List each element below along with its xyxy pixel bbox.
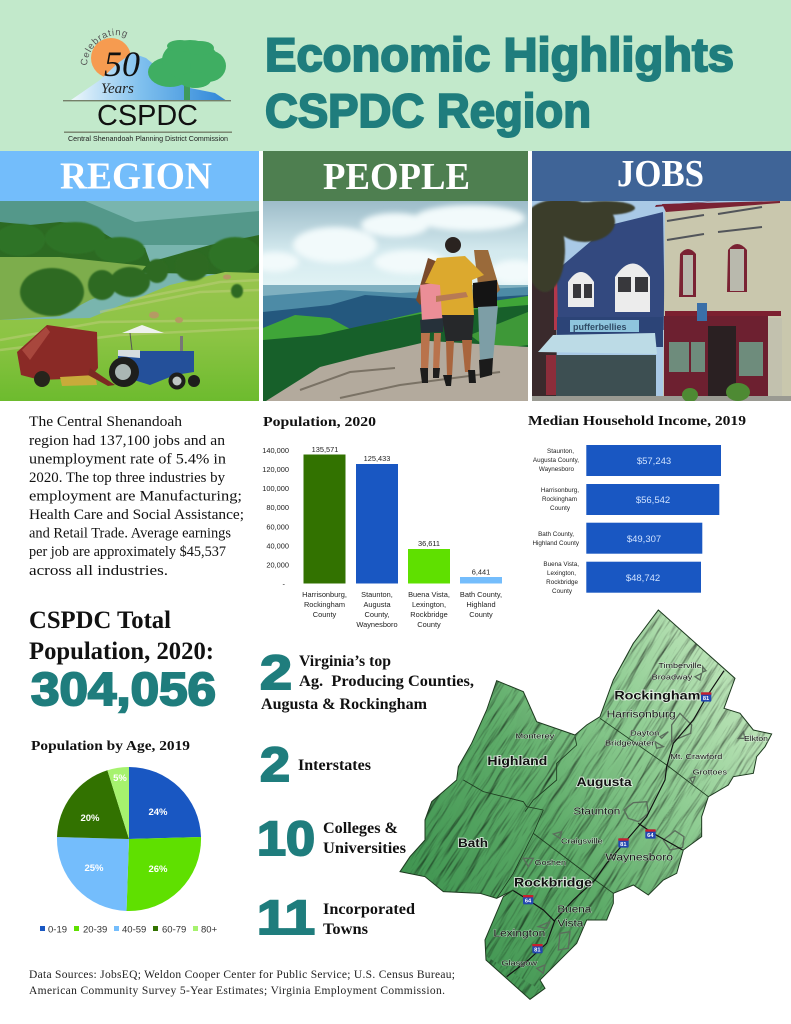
bar chart: population 2020: County bbox=[417, 620, 441, 629]
bar chart: population 2020: County bbox=[469, 610, 493, 619]
town labels: Broadway bbox=[652, 673, 693, 682]
town boundaries bbox=[523, 667, 745, 973]
town labels: Staunton bbox=[573, 806, 620, 817]
logo tree bbox=[148, 40, 226, 101]
stat: towns: Towns bbox=[323, 921, 368, 938]
bar chart: population 2020: 80,000 bbox=[266, 503, 289, 512]
stat: towns: Incorporated bbox=[323, 901, 415, 918]
stat: interstates bbox=[260, 739, 371, 792]
stat: colleges: Universities bbox=[323, 840, 406, 857]
bar chart: median household income: Staunton, bbox=[547, 448, 574, 455]
pie chart: population by age: 25% bbox=[84, 863, 104, 874]
stat: agricultural counties: 2 bbox=[260, 647, 292, 700]
person: woman bbox=[473, 250, 500, 378]
county labels bbox=[458, 688, 700, 889]
pie legend: 60-79 bbox=[162, 924, 186, 936]
text block: jobs summary: region had 137,100 jobs and an bbox=[29, 432, 225, 449]
town labels: Craigsville bbox=[561, 836, 603, 845]
stat: agricultural counties: Ag. Producing Counties, bbox=[299, 673, 474, 690]
highway shields: 64 bbox=[525, 899, 532, 905]
bar chart: median household income: County bbox=[552, 588, 573, 595]
title line 1: Economic Highlights bbox=[265, 28, 734, 81]
logo commission name: Central Shenandoah Planning District Commission bbox=[68, 134, 228, 143]
bar chart: median household income: Rockbridge bbox=[546, 579, 578, 586]
logo rule bottom bbox=[64, 132, 232, 133]
pie legend: 80+ bbox=[201, 924, 218, 936]
town labels: Lexington bbox=[493, 928, 545, 939]
bar chart: median household income: Waynesboro bbox=[539, 466, 574, 473]
bar chart: population 2020: Lexington, bbox=[412, 600, 446, 609]
bar chart: median household income: Harrisonburg, bbox=[541, 487, 579, 494]
header band bbox=[0, 0, 791, 151]
logo years: Years bbox=[101, 81, 134, 97]
town labels: Dayton bbox=[630, 728, 659, 737]
bar chart: population 2020: 140,000 bbox=[262, 446, 289, 455]
pie chart: population by age: 5% bbox=[113, 773, 127, 784]
title line 2: CSPDC Region bbox=[265, 84, 591, 137]
bar chart: median household income: Rockingham bbox=[542, 496, 577, 503]
stat: towns bbox=[257, 892, 415, 945]
photo: downtown storefronts bbox=[525, 199, 791, 402]
total population value: 304,056 bbox=[31, 663, 216, 715]
bar chart: median household income: Highland County bbox=[532, 540, 580, 547]
panel: region heading bbox=[0, 151, 259, 201]
bar chart: median household income: $48,742 bbox=[626, 573, 660, 584]
bar chart: population 2020: Waynesboro bbox=[356, 620, 398, 629]
bar chart: population 2020: 20,000 bbox=[266, 560, 289, 570]
text block: jobs summary: 2020. The top three industries by bbox=[29, 469, 225, 486]
pie chart: population by age: 24% bbox=[148, 807, 168, 818]
logo sun bbox=[91, 38, 131, 78]
highway shields: 81 bbox=[534, 948, 540, 954]
panel: region heading: REGION bbox=[60, 156, 212, 198]
bar chart: population 2020: County, bbox=[365, 610, 389, 619]
text block: jobs summary: The Central Shenandoah bbox=[29, 413, 182, 430]
bar chart: median household income: Augusta County, bbox=[533, 457, 579, 464]
stat: interstates: 2 bbox=[260, 739, 290, 792]
heading: population by age: Population by Age, 2019 bbox=[31, 739, 190, 754]
pie legend: 0-19 bbox=[48, 924, 67, 936]
logo CSPDC: CSPDC bbox=[97, 100, 198, 132]
bar chart: median household income: Lexington, bbox=[547, 570, 576, 577]
bar chart: median household income: Buena Vista, bbox=[543, 561, 579, 568]
bar chart: population 2020: 40,000 bbox=[266, 542, 289, 550]
text block: jobs summary: Health Care and Social Assistance; bbox=[29, 506, 244, 523]
text block: jobs summary: across all industries. bbox=[29, 562, 168, 579]
bar chart: population 2020: 100,000 bbox=[262, 484, 289, 493]
pie chart: population by age bbox=[57, 767, 201, 911]
town labels: Vista bbox=[557, 919, 584, 930]
town labels: Glasgow bbox=[501, 959, 538, 968]
town labels: Grottoes bbox=[693, 767, 727, 776]
photo: family overlooking the mountains bbox=[263, 201, 528, 401]
town labels: Waynesboro bbox=[605, 853, 673, 864]
heading: total population: CSPDC Total bbox=[29, 607, 171, 634]
panel: people heading: PEOPLE bbox=[323, 156, 470, 198]
pie legend: 20-39 bbox=[83, 924, 107, 936]
stat: towns: 11 bbox=[257, 892, 315, 945]
photo: hay baler and tractor in a field bbox=[0, 201, 261, 401]
bar chart: population 2020: - bbox=[283, 580, 286, 588]
person: man bbox=[425, 237, 484, 386]
pie chart: population by age: 26% bbox=[148, 864, 168, 875]
panel: jobs heading: JOBS bbox=[617, 153, 704, 195]
town labels: Buena bbox=[557, 905, 592, 916]
logo 50: 50 bbox=[104, 44, 140, 84]
heading: population chart: Population, 2020 bbox=[263, 415, 376, 430]
heading: total population: Population, 2020: bbox=[29, 638, 214, 665]
bar chart: median household income: County bbox=[550, 505, 571, 512]
bar chart: median household income: Bath County, bbox=[538, 531, 574, 538]
bar chart: population 2020: 125,433 bbox=[364, 454, 390, 463]
heading: median household income: Median Household Income, 2019 bbox=[528, 414, 746, 429]
person: girl bbox=[416, 258, 446, 383]
stat: agricultural counties bbox=[260, 647, 474, 713]
text block: jobs summary: employment are Manufacturing; bbox=[29, 488, 242, 504]
county labels: Highland bbox=[487, 754, 547, 768]
bar chart: median household income: $57,243 bbox=[637, 456, 671, 467]
stat: colleges bbox=[257, 813, 406, 866]
pie chart: population by age: 20% bbox=[80, 813, 100, 824]
highway shields: 81 bbox=[620, 842, 626, 848]
highway shields: 64 bbox=[647, 833, 654, 839]
bar chart: population 2020: Bath County, bbox=[460, 590, 502, 599]
pie legend: 40-59 bbox=[122, 924, 146, 936]
photo: downtown storefronts: pufferbellies bbox=[573, 322, 627, 332]
town labels: Timberville bbox=[658, 661, 702, 670]
logo rule top bbox=[63, 100, 231, 101]
stat: colleges: 10 bbox=[257, 813, 315, 866]
text block: jobs summary: per job are approximately $45,537 bbox=[29, 543, 226, 560]
bar chart: population 2020: Staunton, bbox=[361, 590, 393, 599]
town labels: Harrisonburg bbox=[607, 710, 676, 721]
interstate 81 bbox=[507, 671, 724, 977]
town labels: Goshen bbox=[535, 858, 566, 867]
bar chart: population 2020: County bbox=[313, 610, 337, 619]
town labels: Bridgewater bbox=[605, 738, 655, 747]
bar chart: population 2020: Rockingham bbox=[304, 600, 345, 609]
logo celebrating: Celebrating bbox=[80, 28, 128, 65]
text block: jobs summary: and Retail Trade. Average earnings bbox=[29, 524, 231, 542]
bar chart: population 2020: 60,000 bbox=[266, 522, 289, 532]
panel: jobs heading bbox=[532, 151, 791, 201]
bar chart: population 2020: Highland bbox=[466, 600, 496, 609]
bar chart: population 2020: 135,571 bbox=[312, 445, 338, 454]
bar chart: population 2020: Augusta bbox=[363, 600, 391, 609]
county labels: Rockingham bbox=[614, 688, 700, 702]
bar chart: median household income: $56,542 bbox=[636, 495, 670, 506]
bar chart: population 2020 bbox=[262, 445, 502, 629]
data sources: Data Sources: JobsEQ; Weldon Cooper Center for Public Service; U.S. Census Bureau; bbox=[29, 969, 455, 981]
highway shields bbox=[523, 692, 711, 954]
text block: jobs summary: unemployment rate of 5.4% in bbox=[29, 450, 226, 468]
panel: people heading bbox=[263, 151, 528, 201]
county labels: Bath bbox=[458, 836, 488, 850]
stat: interstates: Interstates bbox=[298, 757, 371, 774]
bar chart: population 2020: Harrisonburg, bbox=[302, 590, 347, 599]
text block: jobs summary bbox=[29, 413, 244, 579]
map: CSPDC region bbox=[400, 610, 772, 1000]
bar chart: population 2020: 120,000 bbox=[262, 465, 289, 474]
town labels: Mt. Crawford bbox=[670, 752, 722, 761]
stat: agricultural counties: Augusta & Rockingham bbox=[261, 696, 427, 713]
title bbox=[265, 28, 734, 137]
county labels: Augusta bbox=[577, 775, 632, 789]
logo: CSPDC 50 years bbox=[63, 28, 232, 143]
town labels: Elkton bbox=[744, 734, 768, 743]
heading: total population bbox=[29, 607, 214, 665]
town labels bbox=[493, 661, 768, 968]
pie legend bbox=[40, 924, 218, 936]
bar chart: population 2020: 6,441 bbox=[472, 568, 490, 576]
data sources bbox=[29, 969, 455, 997]
bar chart: population 2020: 36,611 bbox=[418, 539, 440, 548]
bar chart: median household income bbox=[532, 445, 721, 595]
data sources: American Community Survey 5-Year Estimates; Virginia Employment Commission. bbox=[29, 985, 445, 997]
highway shields: 81 bbox=[703, 696, 709, 702]
stat: colleges: Colleges & bbox=[323, 820, 398, 837]
interstate 64 bbox=[513, 823, 683, 922]
county labels: Rockbridge bbox=[514, 875, 592, 889]
logo mountain bbox=[71, 53, 227, 101]
stat: agricultural counties: Virginia’s top bbox=[299, 653, 391, 670]
town labels: Monterey bbox=[515, 732, 555, 741]
bar chart: population 2020: Buena Vista, bbox=[408, 590, 450, 599]
bar chart: median household income: $49,307 bbox=[627, 534, 661, 545]
bar chart: population 2020: Rockbridge bbox=[410, 610, 448, 619]
